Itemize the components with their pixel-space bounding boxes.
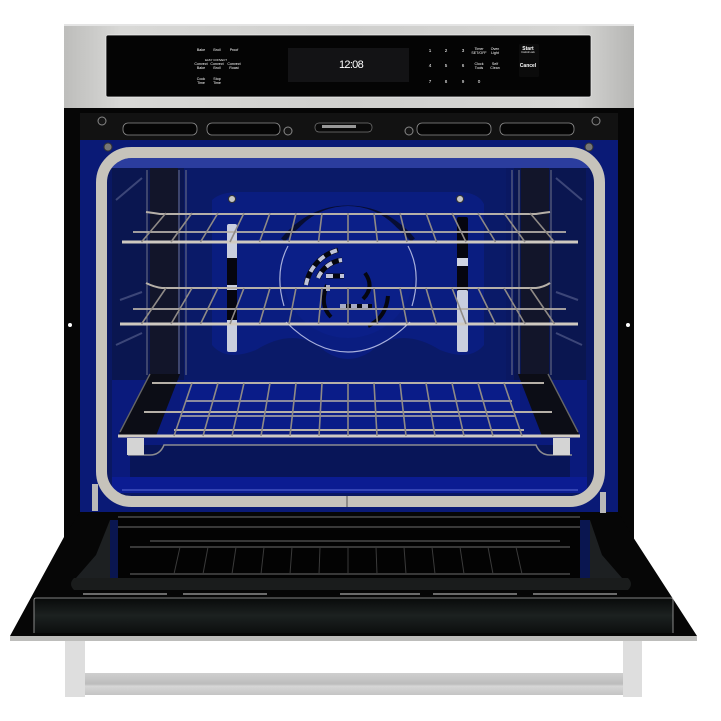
side mounting holes — [68, 323, 630, 327]
oven body — [64, 100, 634, 540]
door lower band — [71, 578, 631, 590]
cavity corner screws — [104, 143, 593, 151]
cooking mode labels: Broil — [213, 48, 221, 52]
bottom rack — [118, 374, 580, 455]
front lip — [34, 598, 673, 633]
timer and option labels — [471, 47, 500, 70]
clock: 12:08 — [339, 59, 364, 71]
start and cancel keys: Cancel — [520, 63, 537, 69]
vent band — [80, 110, 618, 140]
timer and option labels: Timer — [474, 47, 484, 51]
screws — [98, 117, 600, 135]
hinges — [92, 484, 98, 511]
door liner sides — [76, 520, 118, 578]
latch — [315, 123, 372, 132]
side slots — [227, 217, 468, 352]
keypad numbers: 6 — [462, 63, 465, 68]
cooking mode labels: Convect — [210, 62, 224, 66]
gasket seam — [346, 496, 348, 507]
floor — [112, 380, 587, 493]
middle rack — [120, 283, 578, 324]
keypad numbers: 2 — [445, 48, 448, 53]
cooking mode labels: EASY CONVECT — [205, 58, 227, 62]
timer and option labels: Clock — [474, 62, 484, 66]
door gasket — [102, 152, 600, 502]
timer and option labels: Oven — [491, 47, 499, 51]
rack glides — [127, 438, 144, 455]
cooking mode labels: Stop — [213, 77, 221, 81]
cooking mode labels: Convect — [194, 62, 208, 66]
keypad numbers: 5 — [445, 63, 448, 68]
cooking mode labels: Broil — [213, 66, 221, 70]
timer and option labels: Self — [492, 62, 498, 66]
cooking mode labels: Time — [197, 81, 205, 85]
vent slots — [123, 123, 574, 135]
fan cover — [280, 206, 416, 352]
cooking mode labels: Bake — [197, 66, 205, 70]
cooking mode labels: Convect — [227, 62, 241, 66]
back wall — [184, 168, 506, 380]
door vents — [83, 593, 617, 595]
control panel — [64, 24, 634, 108]
right side wall — [512, 168, 586, 380]
ceiling strip — [110, 158, 590, 168]
upper rack — [122, 212, 578, 242]
keypad numbers: 3 — [462, 48, 465, 53]
display — [288, 48, 409, 82]
keypad numbers: 7 — [429, 79, 432, 84]
back wall screws — [228, 196, 236, 202]
timer and option labels: Light — [491, 51, 499, 55]
handle — [65, 641, 642, 697]
start and cancel keys — [519, 44, 539, 77]
timer and option labels: SET/OFF — [471, 51, 487, 55]
cooking mode labels: Bake — [197, 48, 205, 52]
handle posts — [65, 641, 85, 697]
keypad numbers: 0 — [478, 79, 481, 84]
left side wall — [112, 168, 186, 380]
handle bar — [85, 673, 623, 695]
door window — [118, 517, 580, 578]
cooking mode labels: Proof — [230, 48, 238, 52]
door edge — [10, 636, 697, 641]
black touch panel — [106, 35, 591, 97]
keypad numbers: 1 — [429, 48, 432, 53]
open door — [10, 484, 697, 641]
start and cancel keys: Control Lock — [521, 51, 536, 54]
back wall embossed panel — [212, 192, 484, 359]
door inner panel — [10, 512, 697, 636]
keypad numbers: 9 — [462, 79, 465, 84]
timer and option labels: Tools — [475, 66, 483, 70]
keypad numbers: 4 — [429, 63, 432, 68]
keypad numbers: 8 — [445, 79, 448, 84]
cooking mode labels — [194, 48, 241, 85]
cooking mode labels: Cook — [197, 77, 205, 81]
timer and option labels: Clean — [490, 66, 500, 70]
cooking mode labels: Time — [213, 81, 221, 85]
rack slide rails — [118, 374, 180, 436]
start and cancel keys: Start — [522, 46, 534, 52]
oven cavity — [106, 156, 594, 497]
cooking mode labels: Roast — [229, 66, 239, 70]
keypad numbers — [429, 48, 481, 84]
